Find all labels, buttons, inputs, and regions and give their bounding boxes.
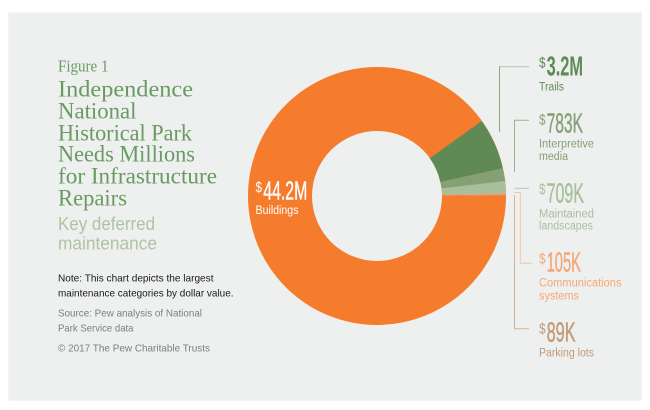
label: interpretive media: $ bbox=[539, 112, 546, 128]
label: buildings: $ bbox=[256, 179, 263, 196]
leader: maintained landscapes bbox=[514, 187, 529, 189]
label: parking lots: Parking lots bbox=[539, 348, 594, 360]
source: Park Service data bbox=[58, 323, 134, 335]
note: maintenance categories by dollar value. bbox=[58, 288, 234, 300]
note bbox=[58, 273, 234, 300]
heading: for Infrastructure bbox=[58, 163, 217, 188]
figure label: Figure 1 bbox=[58, 57, 108, 76]
subtitle bbox=[58, 213, 157, 253]
label: trails: Trails bbox=[539, 82, 564, 94]
label: maintained landscapes: landscapes bbox=[539, 221, 593, 233]
label: maintained landscapes bbox=[539, 177, 594, 233]
label: buildings: Buildings bbox=[256, 205, 299, 217]
label: communications systems: $ bbox=[539, 250, 546, 268]
label: communications systems: 105K bbox=[547, 247, 581, 278]
leader: communications systems bbox=[514, 192, 532, 263]
label: communications systems: systems bbox=[539, 291, 579, 303]
label: interpretive media bbox=[539, 108, 594, 163]
segment: trails bbox=[430, 121, 503, 182]
label: communications systems: Communications bbox=[539, 278, 622, 290]
label: trails bbox=[539, 51, 583, 94]
label: trails: $ bbox=[539, 54, 546, 72]
segment: buildings bbox=[248, 67, 506, 325]
label: parking lots bbox=[539, 317, 594, 360]
source: Source: Pew analysis of National bbox=[58, 308, 202, 320]
subtitle: Key deferred bbox=[58, 213, 155, 234]
subtitle: maintenance bbox=[58, 232, 157, 253]
label: maintained landscapes: Maintained bbox=[539, 209, 594, 221]
donut chart bbox=[248, 67, 506, 325]
heading: National bbox=[58, 98, 136, 123]
label: interpretive media: 783K bbox=[547, 108, 583, 139]
copyright: © 2017 The Pew Charitable Trusts bbox=[58, 343, 210, 355]
label: interpretive media: Interpretive bbox=[539, 139, 594, 151]
label: parking lots: 89K bbox=[547, 317, 576, 348]
heading: Needs Millions bbox=[58, 142, 195, 167]
leader: interpretive media bbox=[514, 120, 529, 172]
label: trails: 3.2M bbox=[547, 51, 583, 82]
segment: maintained landscapes bbox=[442, 181, 506, 195]
label: buildings bbox=[256, 175, 307, 217]
label: maintained landscapes: $ bbox=[539, 181, 546, 198]
label: buildings: 44.2M bbox=[263, 175, 307, 205]
segment: parking lots bbox=[442, 195, 506, 196]
heading: Independence bbox=[58, 77, 193, 102]
heading: Historical Park bbox=[58, 120, 192, 145]
source bbox=[58, 308, 202, 335]
segment: communications systems bbox=[442, 193, 506, 195]
label: parking lots: $ bbox=[539, 320, 546, 338]
label: communications systems bbox=[539, 247, 622, 303]
label: maintained landscapes: 709K bbox=[547, 177, 584, 208]
title block bbox=[58, 57, 217, 210]
heading bbox=[58, 77, 217, 210]
leader: trails bbox=[500, 66, 529, 132]
segment: interpretive media bbox=[440, 168, 505, 188]
heading: Repairs bbox=[58, 185, 127, 210]
note: Note: This chart depicts the largest bbox=[58, 273, 214, 285]
leader: parking lots bbox=[514, 195, 529, 329]
label: interpretive media: media bbox=[539, 151, 569, 163]
